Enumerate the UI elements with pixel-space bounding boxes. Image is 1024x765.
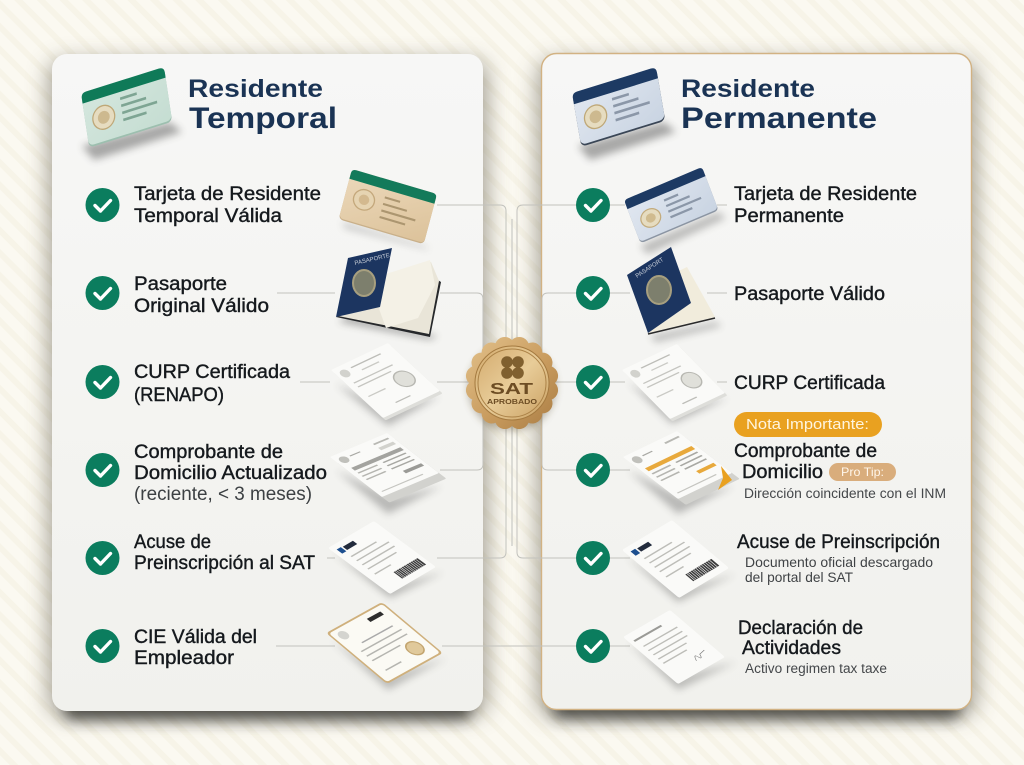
heading: residente temporal: [188, 75, 337, 135]
item: pasaporte valido: Pasaporte Válido: [734, 283, 885, 305]
icon: open passport: [336, 248, 441, 340]
item: acuse sat: Preinscripción al SAT: [134, 552, 315, 574]
connector lines: [276, 205, 727, 646]
item: acuse sat: Acuse de: [134, 531, 211, 553]
item: tarjeta temporal: Tarjeta de Residente: [134, 183, 321, 205]
item: comprobante de domicilio actualizado: [134, 441, 327, 505]
badge: sat aprobado seal: APROBADO: [487, 397, 537, 406]
check icon 4: [86, 453, 120, 487]
item: tarjeta permanente: Tarjeta de Residente: [734, 183, 917, 205]
badge: sat aprobado seal: [466, 337, 558, 431]
check icon 11: [576, 541, 610, 575]
icon: declaration document: [623, 610, 736, 690]
icon: orange invoice: [623, 431, 740, 514]
panel: residente permanente: [537, 54, 977, 719]
item: acuse de preinscripcion: Documento oficial descargado: [745, 554, 933, 570]
header icon: blue card: [572, 67, 676, 160]
icon: open passport: PASAPORTE: [354, 253, 391, 267]
heading: residente temporal: Temporal: [189, 102, 337, 135]
icon: sat document right: [622, 520, 736, 602]
header icon: green card: [81, 67, 182, 160]
item: acuse de preinscripcion: Acuse de Preinscripción: [737, 531, 940, 553]
badge: sat aprobado seal: SAT: [490, 381, 534, 398]
icon: blue card small: [624, 167, 726, 254]
callout: nota importante: Nota Importante:: [746, 417, 869, 433]
icon: curp document right: [622, 344, 728, 424]
item: comprobante de domicilio actualizado: Domicilio Actualizado: [134, 462, 327, 484]
icon: curp document: [331, 343, 443, 426]
check icon 5: [86, 541, 120, 575]
icon: tan card: [339, 169, 437, 250]
item: comprobante de domicilio actualizado: (reciente, < 3 meses): [134, 484, 312, 505]
callout: pro tip: [829, 463, 896, 481]
item: curp certificada: CURP Certificada: [734, 372, 885, 394]
item: declaracion de actividades: [738, 617, 887, 676]
icon: cie certificate: [326, 602, 446, 690]
callout: nota importante: [734, 412, 882, 437]
check icon 12: [576, 629, 610, 663]
item: comprobante de domicilio actualizado: Comprobante de: [134, 441, 283, 463]
check icon 3: [86, 365, 120, 399]
item: comprobante de domicilio: Dirección coincidente con el INM: [744, 486, 946, 501]
heading: residente permanente: Residente: [681, 75, 815, 103]
item: tarjeta permanente: Permanente: [734, 205, 844, 227]
item: declaracion de actividades: Actividades: [742, 637, 841, 659]
item: comprobante de domicilio: [734, 440, 946, 501]
check icon 1: [86, 188, 120, 222]
item: acuse sat: [134, 531, 315, 574]
heading: residente permanente: [681, 75, 877, 135]
check icon 10: [576, 453, 610, 487]
item: curp renapo: (RENAPO): [134, 384, 224, 406]
item: pasaporte original: Pasaporte: [134, 273, 227, 295]
check icon 2: [86, 276, 120, 310]
heading: residente permanente: Permanente: [681, 102, 877, 135]
item: cie empleador: [134, 626, 257, 669]
icon: blue passport: PASAPORT: [635, 257, 665, 280]
item: comprobante de domicilio: Domicilio: [742, 461, 823, 483]
item: curp renapo: CURP Certificada: [134, 361, 290, 383]
item: tarjeta permanente: [734, 183, 917, 227]
item: acuse de preinscripcion: del portal del SAT: [745, 569, 853, 585]
item: pasaporte original: Original Válido: [134, 295, 269, 317]
item: tarjeta temporal: [134, 183, 321, 227]
icon: blue passport: [627, 247, 722, 342]
icon: sat document: [328, 521, 444, 598]
check icon 8: [576, 276, 610, 310]
check icon 7: [576, 188, 610, 222]
item: declaracion de actividades: Declaración de: [738, 617, 863, 639]
item: declaracion de actividades: Activo regimen tax taxe: [745, 661, 887, 676]
check icon 6: [86, 629, 120, 663]
item: pasaporte original: [134, 273, 269, 317]
callout: pro tip: Pro Tip:: [841, 465, 884, 479]
heading: residente temporal: Residente: [188, 75, 323, 103]
item: cie empleador: Empleador: [134, 647, 235, 669]
item: cie empleador: CIE Válida del: [134, 626, 257, 648]
icon: invoice stack: [330, 433, 446, 514]
panel: residente temporal: [48, 54, 488, 720]
check icon 9: [576, 365, 610, 399]
item: tarjeta temporal: Temporal Válida: [134, 205, 282, 227]
item: acuse de preinscripcion: [737, 531, 940, 585]
item: curp renapo: [134, 361, 290, 406]
item: comprobante de domicilio: Comprobante de: [734, 440, 877, 462]
